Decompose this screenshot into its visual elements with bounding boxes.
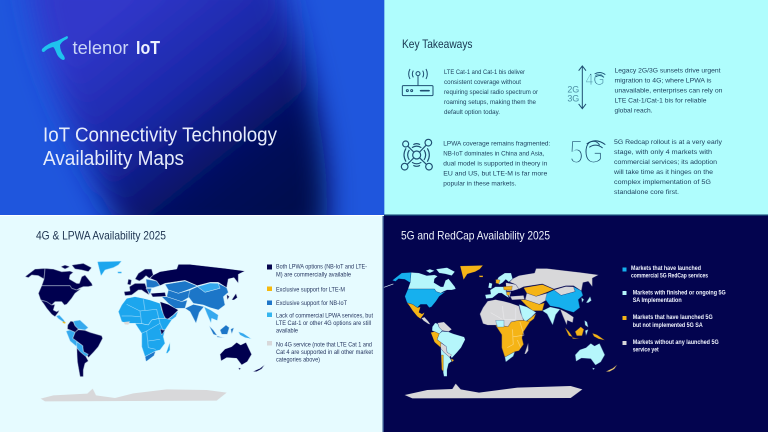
- panel: title cover: [0, 0, 384, 215]
- icon: 2G 3G to 4G migration: 2G: [567, 84, 579, 94]
- text: LTE Cat-1: LTE Cat-1 and Cat-1 bis deliver: [444, 69, 526, 76]
- map: 4G and LPWA world: [25, 261, 265, 401]
- legend: 5G and RedCap: but not implemented 5G SA: [633, 323, 703, 329]
- text: LPWA coverage: [443, 140, 550, 188]
- legend: 5G and RedCap: SA Implementation: [633, 298, 682, 304]
- heading: 5G and RedCap: 5G and RedCap Availability 2025: [401, 228, 550, 242]
- Aleutians: [384, 284, 393, 287]
- Chad: [496, 320, 504, 327]
- icon: 2G 3G to 4G migration: [567, 66, 605, 109]
- legend: 5G and RedCap: Markets that have launched: [631, 266, 701, 272]
- icon: 5G: 5G: [569, 134, 603, 170]
- text: LTE Cat-1: roaming setups, making them the: [444, 99, 536, 106]
- text: LPWA coverage: dual model is supported in theory in: [443, 160, 548, 168]
- legend: 5G and RedCap: Markets without any launched 5G: [633, 340, 719, 346]
- Antarctica: [41, 389, 227, 401]
- text: LTE Cat-1: default option today.: [444, 109, 500, 116]
- legend: 4G and LPWA: Both LPWA options (NB-IoT and LTE-: [276, 264, 367, 270]
- icon: 2G 3G to 4G migration: 3G: [567, 94, 579, 104]
- logo wordmark: IoT: [136, 38, 160, 58]
- legend: 5G and RedCap: Markets with finished or ongoing 5G: [633, 290, 726, 296]
- title: [43, 124, 277, 170]
- text: legacy sunsets: [614, 68, 723, 114]
- legend: 5G and RedCap: commercial 5G RedCap services: [631, 274, 709, 280]
- European market highlights: [496, 279, 512, 295]
- legend: 5G and RedCap: [622, 266, 726, 354]
- text: LTE Cat-1: [444, 69, 539, 116]
- text: 5G Redcap: stage, with only 4 markets with: [614, 149, 712, 156]
- legend: 4G and LPWA: LTE Cat-1 or other 4G options are still: [276, 321, 371, 327]
- logo wordmark: [72, 40, 160, 54]
- legend: 4G and LPWA: [267, 264, 373, 364]
- African borders: [491, 306, 516, 319]
- Antarctica: [405, 384, 582, 398]
- title: Availability Maps: [43, 148, 184, 170]
- panel: key takeaways: [384, 0, 768, 216]
- legend: 4G and LPWA: Cat 4 are supported in all other market: [276, 350, 373, 356]
- icon: LPWA network: [401, 139, 432, 170]
- legend: 4G and LPWA: Lack of commercial LPWA services, but: [276, 314, 373, 320]
- heading: 4G and LPWA: 4G & LPWA Availability 2025: [36, 228, 166, 242]
- text: legacy sunsets: unavailable, enterprises can rely on: [614, 88, 723, 94]
- text: LPWA coverage: NB-IoT dominates in China and Asia,: [443, 150, 544, 158]
- logo wordmark: telenor: [72, 38, 128, 58]
- legend: 4G and LPWA: Exclusive support for NB-IoT: [276, 301, 347, 307]
- legend: 4G and LPWA: Exclusive support for LTE-M: [276, 288, 345, 294]
- Argentina strip: [441, 355, 443, 372]
- legend: 5G and RedCap: service yet: [633, 348, 659, 354]
- title: IoT Connectivity Technology: [43, 124, 277, 146]
- text: 5G Redcap: standalone core first.: [614, 189, 679, 196]
- panel: 4G and LPWA availability: [0, 216, 384, 432]
- text: LTE Cat-1: consistent coverage without: [444, 79, 521, 86]
- legend: 4G and LPWA: available: [276, 328, 299, 334]
- legend: 4G and LPWA: M) are commercially available: [276, 272, 352, 278]
- text: 5G Redcap: will take time as it hinges on the: [613, 169, 713, 176]
- text: LPWA coverage: EU and US, but LTE-M is far more: [443, 170, 548, 178]
- panel: 5G and RedCap availability: [384, 216, 768, 432]
- legend: 5G and RedCap: Markets that have launched 5G: [633, 315, 713, 321]
- icon: 2G 3G to 4G migration: 4G: [585, 70, 605, 89]
- text: legacy sunsets: LTE Cat-1/Cat-1 bis for reliable: [614, 98, 707, 104]
- icon: router: [402, 69, 433, 96]
- text: LPWA coverage: popular in these markets.: [443, 180, 516, 188]
- legend: 4G and LPWA: categories above): [276, 358, 320, 364]
- text: LPWA coverage: LPWA coverage remains fragmented:: [443, 140, 550, 148]
- text: LTE Cat-1: requiring special radio spectrum or: [444, 89, 539, 96]
- icon: telenor logo: [42, 36, 68, 60]
- legend: 4G and LPWA: No 4G service (note that LTE Cat 1 and: [276, 342, 372, 348]
- text: legacy sunsets: global reach.: [614, 108, 653, 114]
- text: 5G Redcap: [613, 139, 723, 196]
- text: 5G Redcap: commercial services; its adoption: [614, 159, 717, 166]
- text: 5G Redcap: 5G Redcap rollout is at a very early: [614, 139, 723, 146]
- text: legacy sunsets: migration to 4G; where LPWA is: [614, 78, 712, 84]
- heading: key takeaways: Key Takeaways: [402, 37, 472, 51]
- map: 5G and RedCap world: [384, 265, 617, 398]
- text: legacy sunsets: Legacy 2G/3G sunsets drive urgent: [614, 68, 721, 74]
- text: 5G Redcap: complex implementation of 5G: [614, 179, 711, 186]
